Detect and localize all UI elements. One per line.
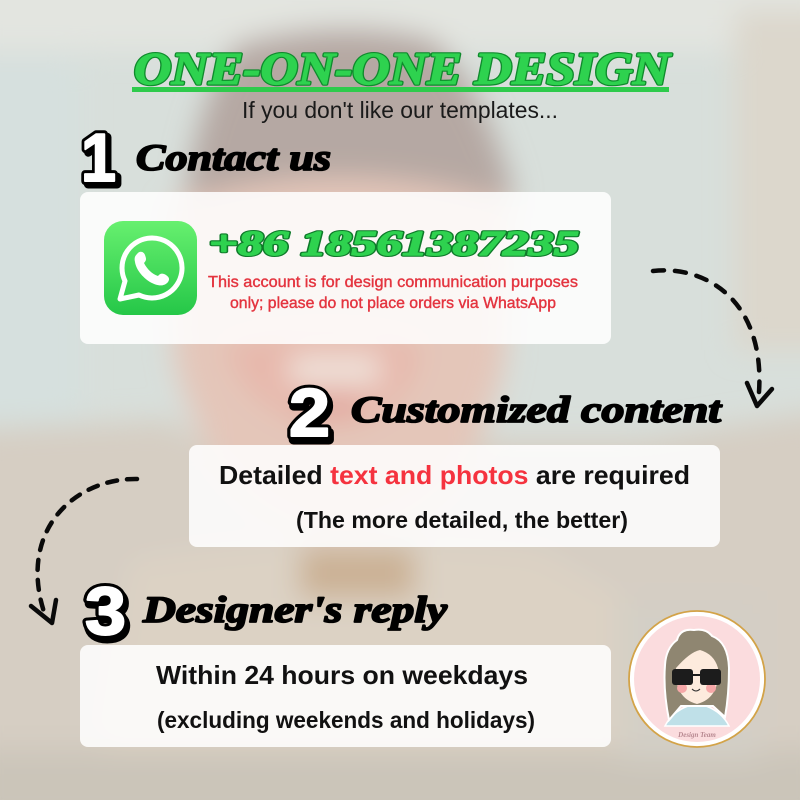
step 2 heading [289, 375, 723, 455]
warning text: only; please do not place orders via WhatsApp [230, 295, 556, 312]
warning text [208, 274, 578, 312]
number 2: 2 [289, 375, 330, 451]
heading: contact us: Contact us [136, 138, 331, 179]
panel: content [189, 445, 720, 547]
subtitle: If you don't like our templates... [242, 97, 558, 123]
designer avatar badge [629, 611, 765, 747]
number 3: 3 [85, 573, 126, 649]
number 1: 1 [81, 120, 116, 196]
panel: reply [80, 645, 611, 747]
note text: (The more detailed, the better) [296, 507, 628, 533]
face [676, 650, 718, 704]
reply time: Within 24 hours on weekdays [156, 660, 528, 690]
icon: WhatsApp [104, 221, 197, 315]
requirement text: Detailed text and photos are required [219, 460, 690, 490]
phone number: +86 18561387235 [209, 224, 579, 263]
number 3: 3 [85, 573, 126, 649]
number 2: 2 [289, 375, 330, 451]
hoodie [665, 706, 729, 726]
arrow: step 1 to step 2 [653, 270, 772, 406]
number 2: 2 [291, 379, 332, 455]
cheeks [677, 683, 687, 693]
arrow: step 2 to step 3 [31, 479, 137, 623]
smile [692, 689, 700, 691]
reply note: (excluding weekends and holidays) [157, 707, 535, 733]
step 1 heading [81, 120, 331, 199]
number 1: 1 [81, 120, 116, 196]
heading: customized content: Customized content [351, 390, 723, 431]
title: ONE-ON-ONE DESIGN [134, 43, 672, 94]
phone number: +86 18561387235 [209, 224, 579, 263]
number 3: 3 [87, 577, 128, 653]
title: ONE-ON-ONE DESIGN [134, 43, 672, 94]
panel: contact [80, 192, 611, 344]
heading: designer's reply: Designer's reply [142, 590, 448, 631]
sunglasses [672, 669, 721, 685]
number 1: 1 [84, 123, 119, 199]
phone number [209, 224, 579, 263]
warning text: This account is for design communication purposes [208, 274, 578, 291]
hair [664, 630, 729, 720]
signature: Design Team [677, 731, 716, 739]
step 3 heading [85, 573, 448, 653]
